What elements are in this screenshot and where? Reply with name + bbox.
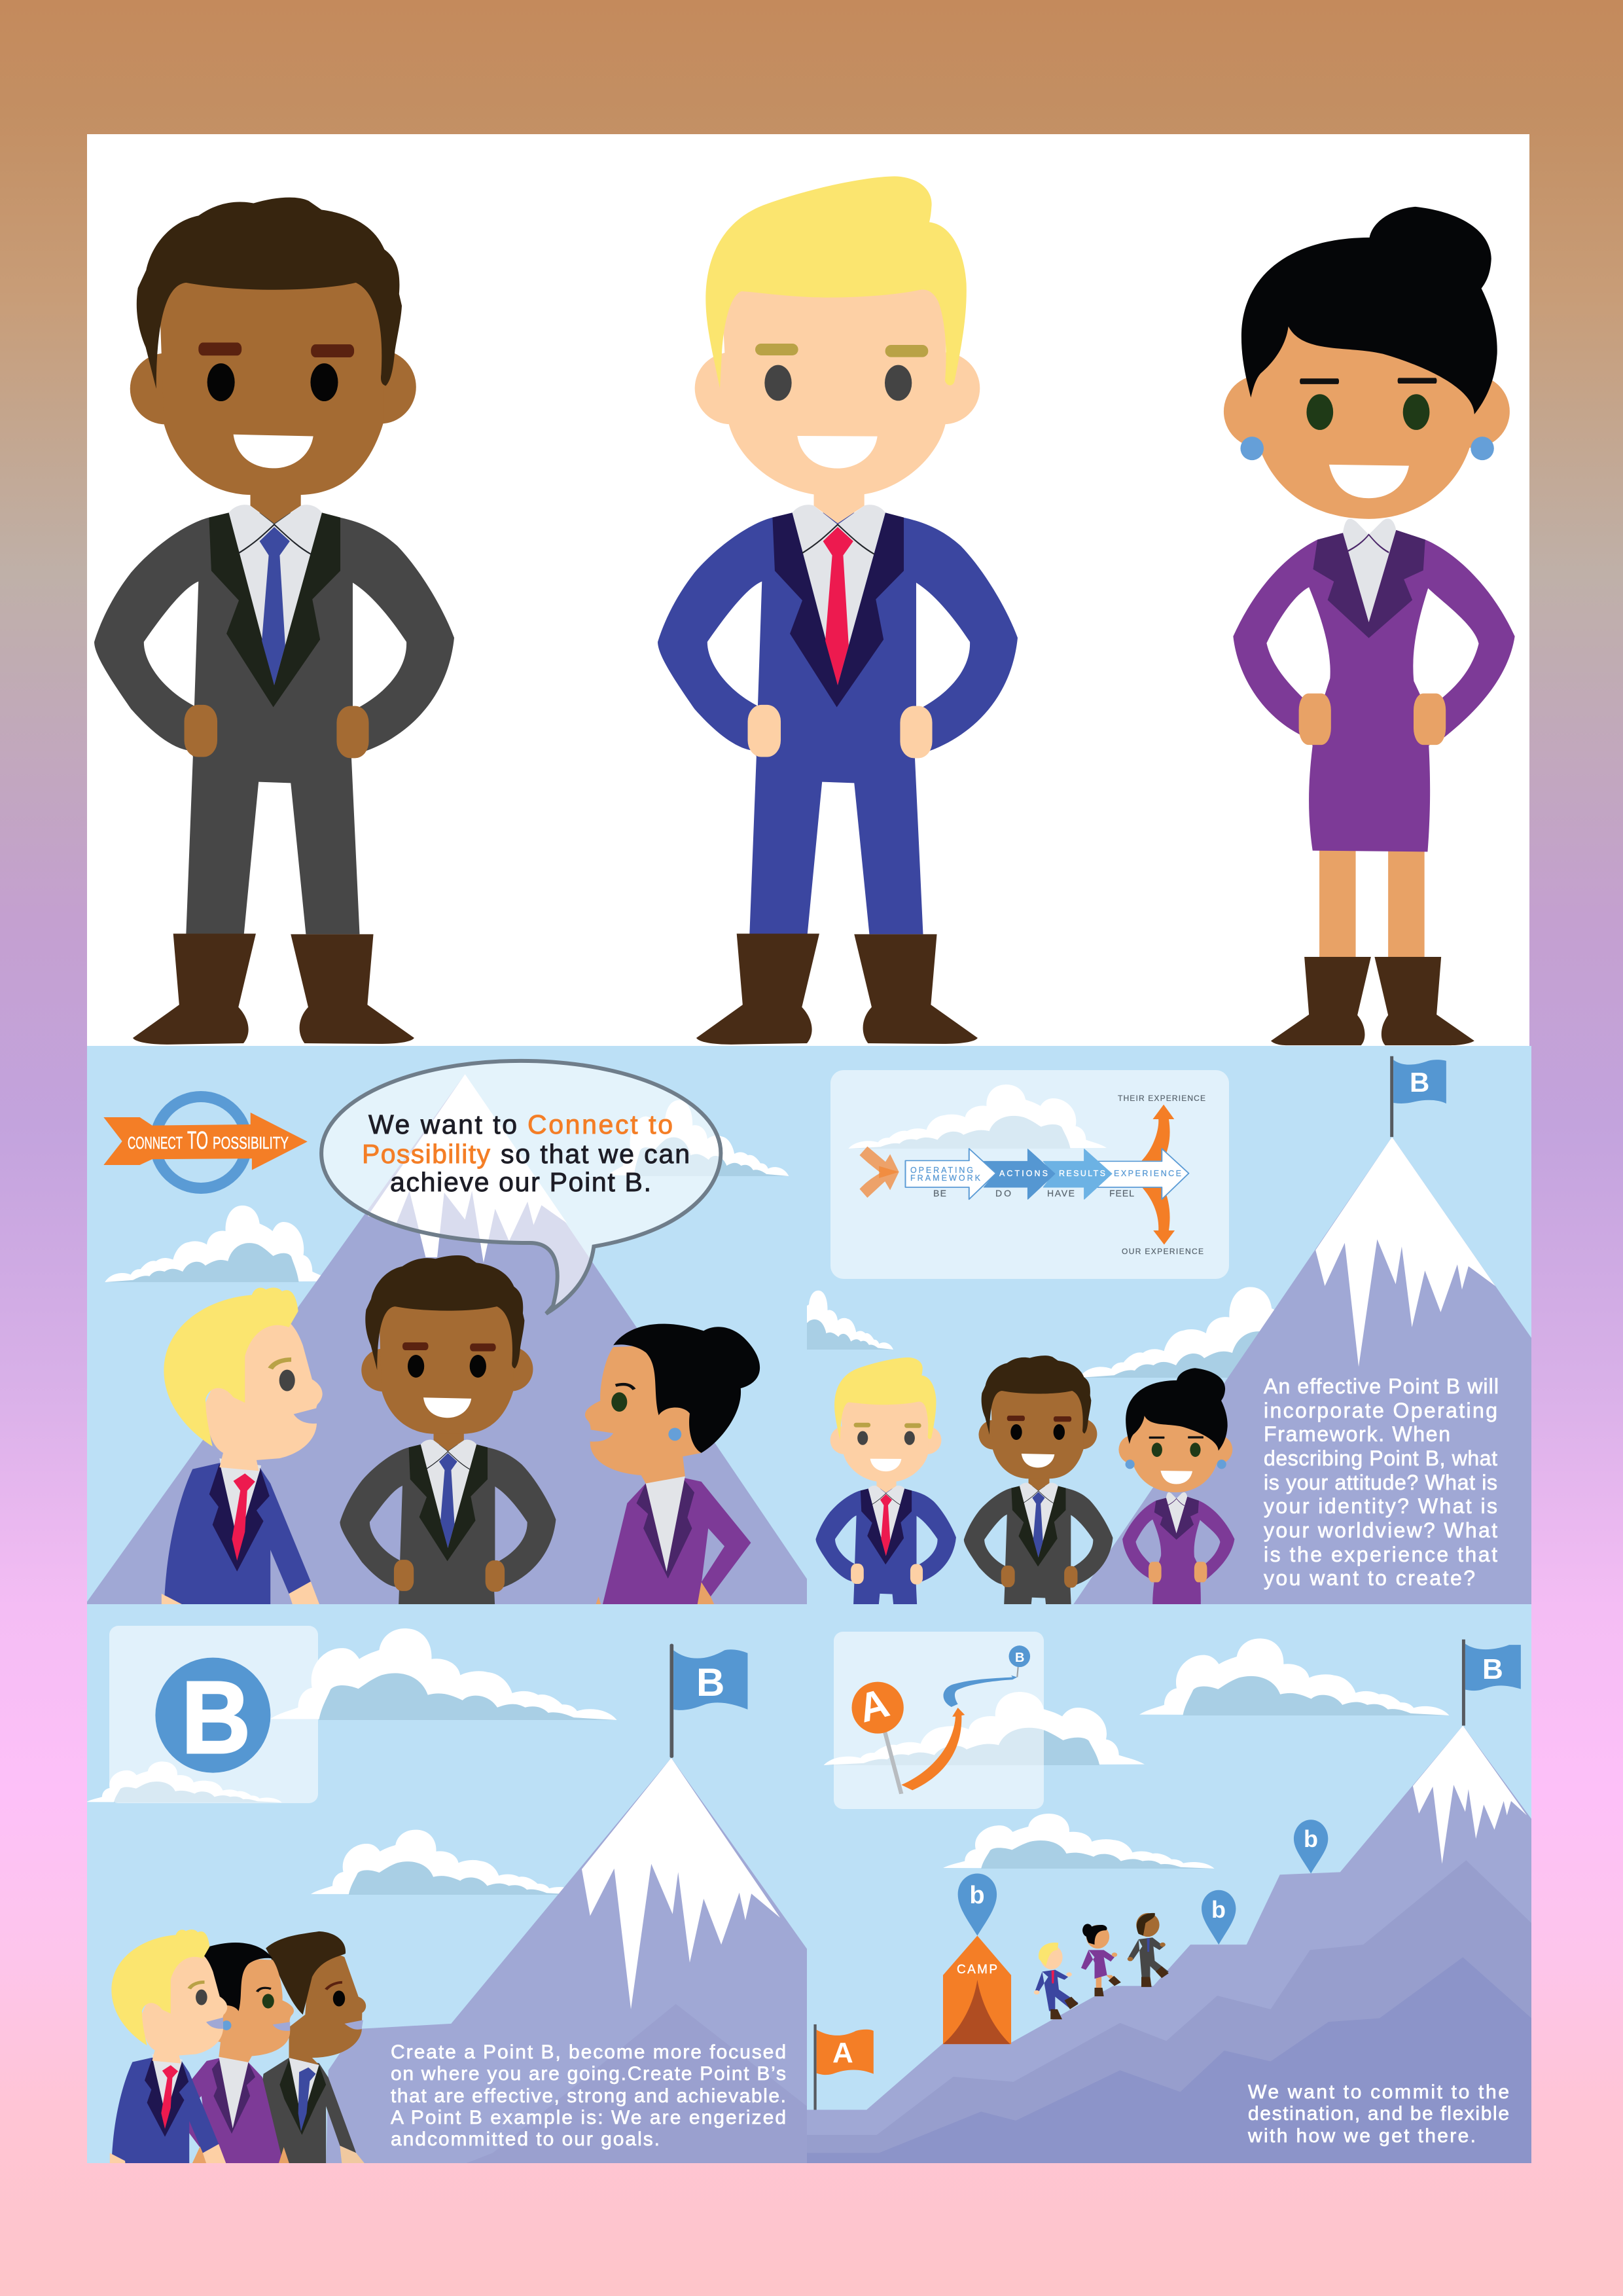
text: effective point B: is the experience that [1264, 1543, 1497, 1566]
diagram: operating framework arrows: OPERATING [910, 1166, 973, 1175]
flag B [1462, 1640, 1521, 1726]
speech bubble: Connect to [527, 1109, 673, 1139]
text: create a point B: A Point B example is: We are engerized [391, 2107, 786, 2128]
diagram box [830, 1070, 1229, 1279]
B badge box [109, 1626, 318, 1803]
diagram: operating framework arrows [859, 1094, 1205, 1256]
text: create a point B: Create a Point B, become more focused [391, 2041, 786, 2063]
character: blond man [815, 1357, 956, 1604]
character: blond man [658, 176, 1018, 1045]
walking figure: dark-haired man [1128, 1913, 1169, 1987]
diagram: operating framework arrows: OUR EXPERIENCE [1122, 1247, 1204, 1256]
walking figure: woman [1081, 1924, 1121, 1996]
diagram: operating framework arrows: BE [933, 1188, 946, 1198]
cloud top right [1139, 1638, 1449, 1715]
B badge [155, 1658, 270, 1775]
logo: connect to possibility: POSSIBILITY [213, 1133, 289, 1153]
cloud right [609, 1100, 789, 1176]
camp tent: CAMP [957, 1963, 997, 1977]
route icon: A to B: A [854, 1680, 894, 1732]
cloud in route box [824, 1692, 1145, 1765]
sky [807, 1046, 1531, 1604]
middle cloud [311, 1830, 580, 1895]
speech bubble: so that we can [501, 1139, 690, 1169]
flag B: B [1482, 1653, 1503, 1685]
logo: connect to possibility [103, 1097, 308, 1189]
pin b upper: b [1304, 1825, 1318, 1852]
sky [807, 1604, 1531, 2163]
speech bubble [321, 1061, 721, 1314]
panel: create a point B [86, 1604, 812, 2174]
text: effective point B: your worldview? What [1264, 1518, 1497, 1542]
small cloud in box [86, 1761, 282, 1803]
text: effective point B: describing Point B, what [1264, 1446, 1497, 1470]
speech bubble: achieve our Point B. [390, 1167, 651, 1197]
flag A [813, 2024, 874, 2110]
speech bubble: We want to [368, 1109, 517, 1139]
logo: connect to possibility: CONNECT [128, 1133, 183, 1153]
route box [834, 1632, 1044, 1809]
diagram: operating framework arrows: THEIR EXPERIENCE [1118, 1094, 1205, 1103]
camp tent [943, 1935, 1011, 2044]
text: effective point B [1264, 1374, 1499, 1590]
cloud behind team [1082, 1287, 1274, 1378]
character: woman in purple [1224, 207, 1515, 1045]
character: dark-haired man in profile [249, 1931, 368, 2167]
diagram: operating framework arrows: RESULTS [1059, 1169, 1105, 1178]
text: commit to destination [1247, 2081, 1509, 2147]
mountain with snowcap [1071, 1137, 1531, 1607]
character: dark-haired man speaking [340, 1255, 556, 1604]
text: create a point B: on where you are going.Create Point B’s [391, 2063, 786, 2085]
pin b middle: b [1211, 1896, 1226, 1923]
big cloud [270, 1628, 617, 1720]
character: blond man in profile [162, 1287, 326, 1622]
diagram: operating framework arrows: FEEL [1109, 1188, 1134, 1198]
character: woman in profile [163, 1943, 294, 2166]
B badge: B [181, 1660, 251, 1775]
text: create a point B: andcommitted to our goals. [391, 2128, 660, 2150]
flag B: B [1410, 1067, 1429, 1098]
cloud middle [943, 1814, 1215, 1869]
character: dark-haired man [963, 1355, 1113, 1604]
route icon: A to B [852, 1645, 1030, 1794]
cloud in diagram box [848, 1085, 1107, 1149]
text: effective point B: you want to create? [1264, 1566, 1475, 1590]
cloud left [105, 1206, 330, 1282]
flag B: B [696, 1660, 724, 1704]
text: effective point B: is your attitude? What is [1264, 1471, 1497, 1494]
diagram: operating framework arrows: DO [995, 1188, 1011, 1198]
pin b at camp [958, 1874, 997, 1935]
speech bubble: Possibility [362, 1139, 491, 1169]
walking figure: blond man [1034, 1943, 1079, 2019]
flag A: A [832, 2037, 853, 2069]
cloud left [807, 1291, 893, 1350]
text: commit to destination: We want to commit to the [1248, 2081, 1509, 2103]
flag B [1390, 1056, 1446, 1137]
character: dark-haired man [94, 198, 454, 1045]
logo: connect to possibility: TO [187, 1127, 208, 1155]
sky [87, 1046, 807, 1604]
panel: character lineup [87, 134, 1529, 1046]
character: woman [1118, 1368, 1234, 1604]
text: effective point B: An effective Point B will [1264, 1374, 1499, 1398]
white backdrop [87, 134, 1529, 1046]
text: commit to destination: destination, and be flexible [1248, 2103, 1509, 2125]
text: effective point B: your identity? What is [1264, 1494, 1497, 1518]
pin b middle [1202, 1890, 1236, 1945]
mountain ridges [805, 1726, 1531, 2167]
panel: effective point B [807, 1046, 1531, 1604]
diagram: operating framework arrows: HAVE [1047, 1188, 1075, 1198]
route icon: A to B: B [1015, 1651, 1024, 1665]
panel: connect to possibility conversation [87, 1046, 807, 1604]
character: blond man in profile [110, 1929, 230, 2174]
flag B [669, 1643, 747, 1758]
text: create a point B: that are effective, strong and achievable. [391, 2085, 786, 2107]
text: effective point B: Framework. When [1264, 1422, 1450, 1446]
text: commit to destination: with how we get there. [1247, 2125, 1476, 2147]
diagram: operating framework arrows: FRAMEWORK [910, 1174, 981, 1183]
character: woman in profile [585, 1324, 760, 1622]
mountain with snowcap [326, 1758, 812, 2167]
pin b upper [1294, 1820, 1328, 1874]
mountain [85, 1074, 812, 1607]
panel: commit to the destination [805, 1604, 1531, 2167]
sky [87, 1604, 807, 2163]
text: effective point B: incorporate Operating [1264, 1399, 1497, 1422]
text: create a point B [391, 2041, 786, 2150]
pin b at camp: b [969, 1882, 985, 1909]
diagram: operating framework arrows: ACTIONS [999, 1169, 1048, 1178]
diagram: operating framework arrows: EXPERIENCE [1114, 1169, 1181, 1178]
